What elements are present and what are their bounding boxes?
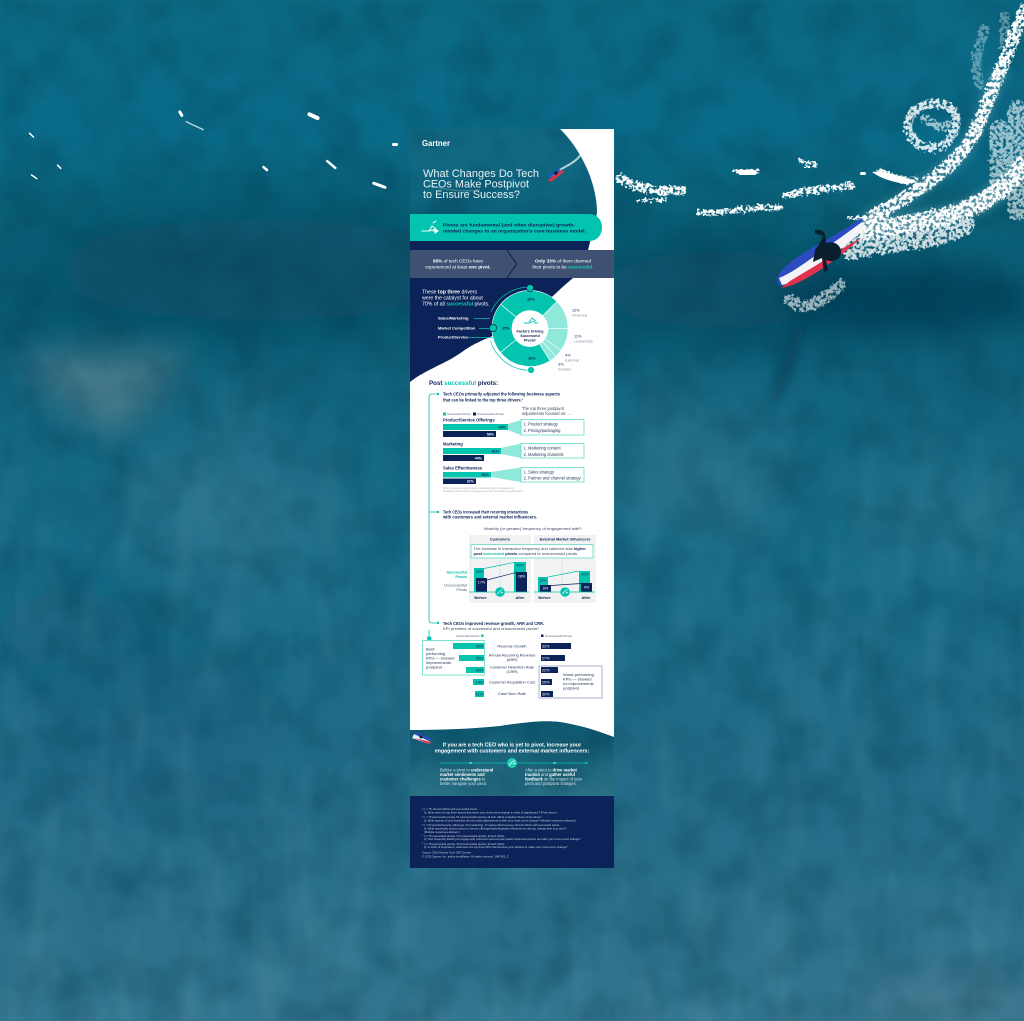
bar chart: business adjustments: 51% [482,473,490,477]
callout: best performing KPIs: KPIs — showed [426,656,454,660]
bar chart: customers [469,562,529,600]
callout: worst performing KPIs: KPIs — showed [563,676,591,682]
finding 3 [422,621,602,698]
row labels: Pivots [455,574,467,579]
bar chart: external market influencers: 15% [539,578,547,582]
callouts: top three adjustments: 1. Sales strategy [524,469,555,474]
bar chart: customers: 17% [478,580,486,584]
logo: Gartner: Gartner [422,139,451,148]
focus note: The top three postpivot [522,406,565,411]
legend: Successful Pivots [447,412,471,416]
footnotes: ³ n = 52 (product/service offerings), 43 (marketing), 37 (sales effectiveness); all tech CEOs with successful pivots. [422,823,560,827]
callouts: top three adjustments: 2. Marketing channels [524,452,564,457]
diverging bar chart: KPIs: 38% [476,656,484,660]
callouts: top three adjustments: 1. Marketing content [524,446,561,451]
title: to Ensure Success? [423,189,520,201]
callout: best performing KPIs [422,630,484,675]
diverging bar chart: KPIs [453,643,571,697]
drivers intro text: These top three drivers [422,290,477,296]
diverging bar chart: KPIs: 11% [476,692,484,696]
callout: best performing KPIs: postpivot [426,664,443,670]
centre label: Successful [520,334,540,338]
segment values: 26% [528,356,536,360]
callout: worst performing KPIs: postpivot [563,686,580,690]
chart panels: Customers [490,536,510,542]
donut chart: factors driving successful pivots [489,284,593,374]
callout: worst performing KPIs: no improvements [563,681,594,686]
finding 2 [442,510,596,603]
callout: worst performing KPIs [539,666,602,698]
bar chart: customers: After [515,595,525,600]
bar chart: external market influencers: After [581,595,591,600]
footnotes [410,796,614,868]
legend [443,412,504,416]
diverging bar chart: KPIs: 30% [476,668,484,672]
footnotes: Q: How frequently did/do you engage with customers and external market influencers before and after your most recent change? [424,837,581,841]
before a pivot text [440,768,494,786]
title: What Changes Do Tech [423,168,539,180]
bar chart: customers: Before [474,595,487,600]
right hand labels: External [565,358,579,362]
bar chart: business adjustments: 61% [492,450,500,454]
row labels: Successful [446,570,467,574]
section heading: Post successful pivots: [429,380,498,387]
footnote: other adjustments: Other business adjustments included brand management, [443,486,515,490]
driver labels: Market Competition [438,326,476,330]
statistics band: their pivots to be successful. [532,264,594,270]
footnotes: (Multiple responses allowed.) [424,830,460,834]
diverging bar chart: KPIs: 33% [542,644,550,648]
legend: Unsuccessful Pivots [477,412,504,416]
bar chart: business adjustments [443,418,521,484]
dotted connectors [500,558,562,590]
diverging bar chart: KPIs: Customer Acquisition Cost [489,679,536,684]
callouts: top three adjustments: 2. Pricing/packaging [524,428,561,433]
bar chart: external market influencers: Before [538,595,551,600]
after a pivot text: pivot and postpivot changes. [525,781,577,786]
segment values: 26% [527,298,535,302]
navy drivers area [410,278,573,382]
statistics band [410,250,614,278]
bar chart: external market influencers: 30% [581,572,589,576]
row labels [444,570,467,592]
chart panels [469,535,596,603]
outer accents [491,287,530,312]
callout: interaction increase [471,544,593,558]
legend: Successful Pivots [456,634,480,638]
callout: best performing KPIs: improvements [426,660,451,665]
footnote: other adjustments: business performance management and corporate development. [443,489,523,493]
right segments [540,302,568,361]
legend [456,634,572,638]
timeline bracket [429,393,439,624]
before a pivot text: Before a pivot to understand [440,768,494,772]
legend: Unsuccessful Pivots [545,634,572,638]
before a pivot text: better navigate your pivot. [440,781,487,786]
callouts: top three adjustments: 1. Product strategy [524,422,559,427]
right hand labels: 4% [565,354,571,358]
before a pivot text: customer challenges to [440,776,486,782]
after a pivot text: feedback on the impact of your [525,776,583,782]
drivers intro text: were the catalyst for about [422,296,483,302]
footnotes: Q: What specifically about product or service offerings/marketing/sales effectiveness did you change after your pivot? [424,826,567,830]
finding 1 [443,392,584,493]
right hand labels: Leadership [574,340,593,344]
segment values: 25% [502,326,510,330]
driver labels [438,316,493,340]
statistics band: Only 33% of them deemed [535,258,592,264]
bar chart: external market influencers [534,571,595,600]
bar chart: business adjustments: 44% [475,456,483,460]
bar chart: business adjustments: 31% [467,480,475,484]
diverging bar chart: KPIs: 58% [476,644,484,648]
finding 3: KPI priorities of successful and unsuccessful pivots⁴ [443,626,539,631]
diverging bar chart: KPIs: Customer Retention Rate [490,665,534,670]
finding 1: Tech CEOs primarily adjusted the following business aspects [443,392,561,396]
right hand labels: Financial [572,314,587,318]
footnotes: ⁴ n = 75 (successful pivots), 54 (unsuccessful pivots); all tech CEOs. [422,834,505,838]
before a pivot text: market sentiments and [440,772,485,777]
callout: interaction increase: post successful pivots compared to unsuccessful pivots. [474,551,578,556]
diverging bar chart: KPIs: Annual Recurring Revenue [489,653,535,658]
bar chart: business adjustments: 56% [487,432,495,436]
finding 3: Tech CEOs improved revenue growth, ARR and CRR. [443,621,544,626]
bar chart: customers: 28% [518,574,526,578]
centre label: Pivots¹ [524,338,537,342]
row labels: Unsuccessful [444,582,467,588]
after a pivot text [525,768,583,786]
finding 2: with customers and external market influencers. [442,514,537,520]
diverging bar chart: KPIs: 25% [542,680,550,684]
callout: interaction increase: The increase in interaction frequency and cadence was higher [474,546,586,551]
definition banner: minded changes to an organization's core business model. [443,229,587,235]
callouts: top three adjustments [521,420,584,482]
chart caption: Monthly (or greater) frequency of engagement with³: [484,526,582,531]
diverging bar chart: KPIs: 14% [476,680,484,684]
diverging bar chart: KPIs: 22% [542,668,550,672]
title: CEOs Make Postpivot [423,178,529,190]
driver labels: Product/Service [438,334,469,340]
bar chart: customers: 40% [516,564,524,568]
diverging bar chart: KPIs: 27% [542,656,550,660]
bar chart: external market influencers: 9% [584,586,590,590]
right hand labels: 3% [558,362,564,366]
drivers intro text [422,290,490,308]
call to action section: engagement with customers and external market influencers: [435,748,590,754]
callout: worst performing KPIs: Worst-performing [563,672,594,677]
row labels: Pivots [456,587,467,592]
footnotes: Source: 2023 Gartner Tech CEO Survey [422,850,472,854]
diverging bar chart: KPIs: Cash Burn Rate [498,691,526,696]
footnotes: Q: What aspects of your business did you make adjustments to after your most recent change? (Multiple responses allowed.) [424,818,576,822]
bar chart: business adjustments: 69% [499,426,507,430]
centre label [512,310,548,346]
finding 2: Tech CEOs increased their recurring interactions [443,510,529,514]
timeline [440,758,588,768]
footnotes: ² n = 70 (successful pivots), 54 (unsuccessful pivots); all tech CEOs excluding "None of the above". [422,815,543,819]
after a pivot text: After a pivot to drive market [525,768,578,772]
finding 1: adjustments focused on: ... [522,411,571,416]
footnote: other adjustments [443,486,523,493]
footnotes: Q: In order of importance, what were the top three KPIs that directed your decision to make your most recent change? [424,845,568,849]
call to action heading: If you are a tech CEO who is yet to pivot, increase your [443,742,581,748]
callout: best performing KPIs: Best- [426,646,436,652]
right hand labels: 12% [572,308,580,312]
top and left and bottom segments [492,290,557,366]
footnotes: ¹ n = 75, all tech CEOs with successful pivots. [422,807,478,811]
chart panels: External Market Influencers [540,536,590,542]
icon: small surfer [412,732,431,744]
diverging bar chart: KPIs: (ARR) [507,657,518,662]
footnotes: ⁵ n = 75 (successful pivots), 54 (unsuccessful pivots); all tech CEOs. [422,842,505,846]
bar chart: external market influencers: 6% [543,586,549,590]
infographic panel [410,129,614,868]
right hand labels: 11% [574,334,582,338]
drivers intro text: 70% of all successful pivots. [422,302,490,308]
bar chart: customers: 30% [476,570,484,574]
surfer and foam wake [29,12,1024,306]
title [423,168,539,201]
call to action section [410,720,614,796]
centre label: Factors Driving [516,330,544,334]
header photo with curve [410,129,600,250]
segment values [502,298,536,360]
bar chart: business adjustments: Sales Effectiveness [443,466,483,470]
icon: pivot arrow [422,221,438,233]
diverging bar chart: KPIs: Revenue Growth [497,643,527,648]
driver labels: Sales/Marketing [438,316,469,320]
callouts: top three adjustments: 2. Partner and channel strategy [524,476,582,480]
right hand labels [558,308,593,372]
footnotes: © 2023 Gartner, Inc. and/or its affiliates. All rights reserved. 1847651_C [422,854,509,858]
finding 1: that can be linked to the top three drivers.² [443,398,524,402]
right hand labels: Investor [558,368,572,372]
bar chart: business adjustments: Marketing [443,442,463,446]
definition banner [410,214,602,241]
after a pivot text: traction and gather useful [525,772,575,777]
diverging bar chart: KPIs: 30% [542,692,550,696]
statistics band: 85% of tech CEOs have [433,258,483,264]
diverging bar chart: KPIs: (CRR) [506,669,518,674]
bar chart: business adjustments: Product/Service Offerings [443,418,495,423]
statistics band: experienced at least one pivot. [425,264,491,270]
footnotes: Q: What were the top three factors that drove your most recent change in order of significance? (First choice.) [424,810,557,814]
definition banner: Pivots are fundamental (and often disruptive) growth- [443,223,575,229]
panel background [410,129,614,868]
callout: best performing KPIs: performing [426,651,445,656]
